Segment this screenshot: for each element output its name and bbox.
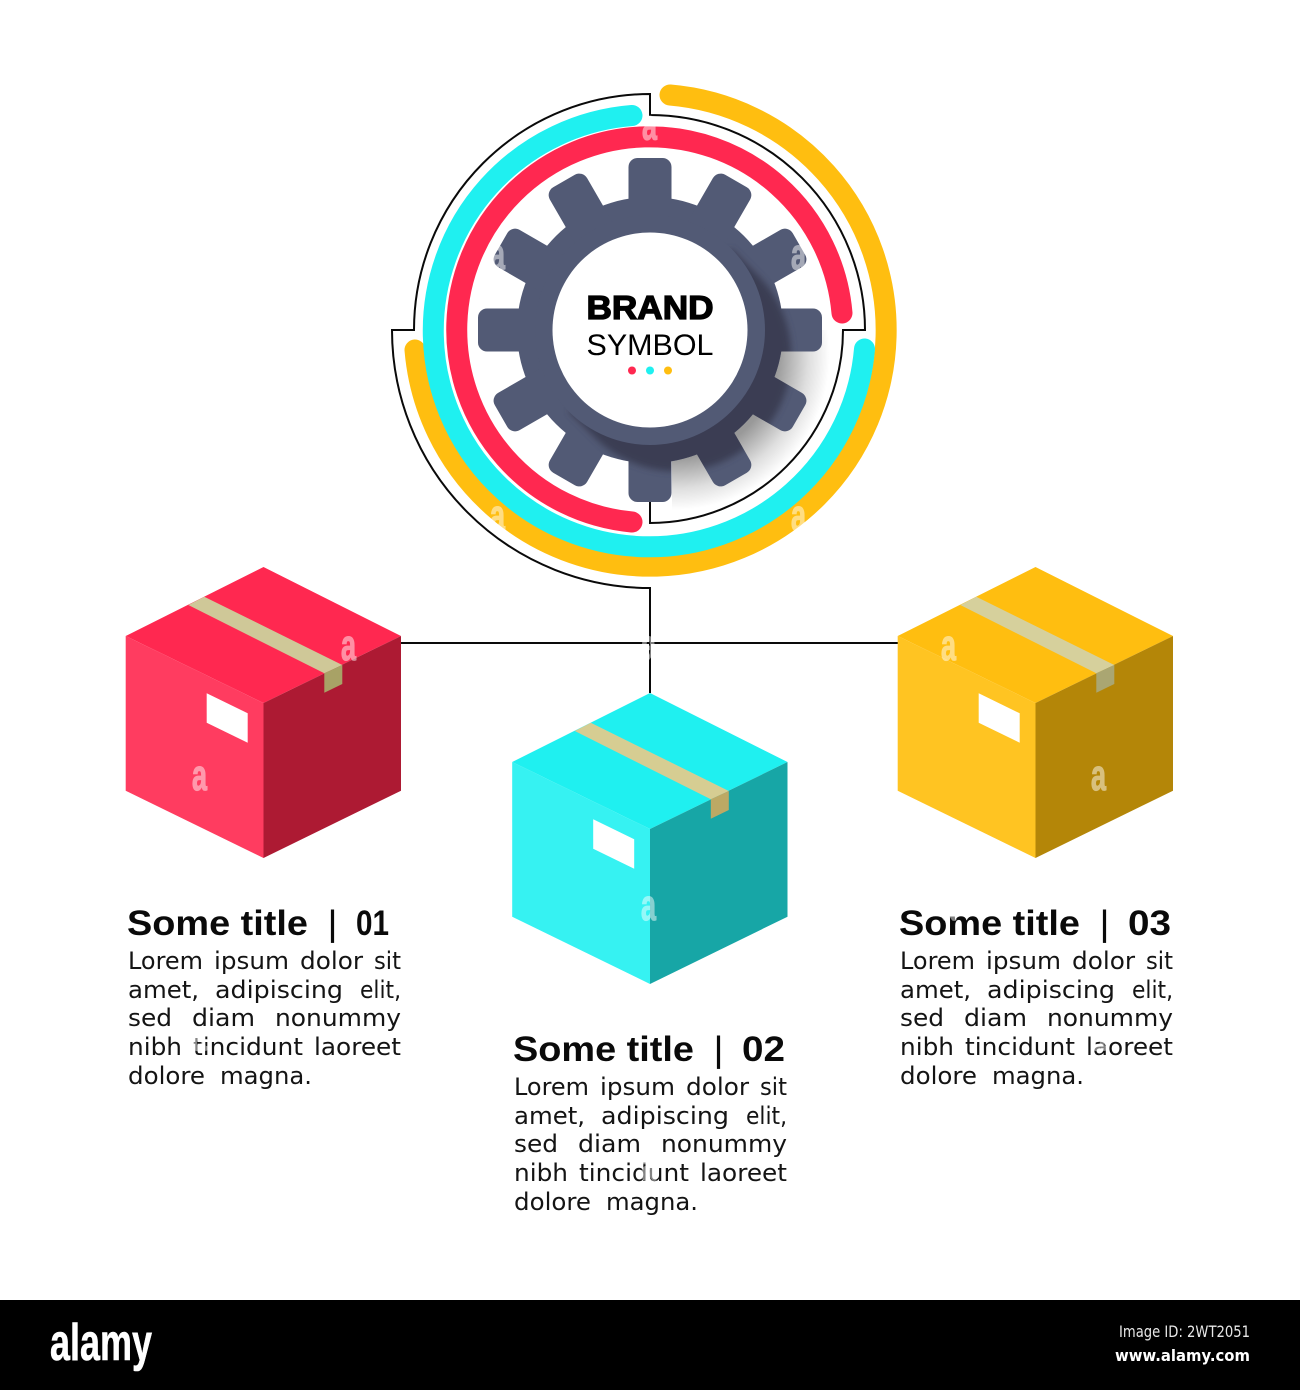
watermark marks: a (791, 230, 806, 279)
text block 01: Some title (127, 904, 308, 943)
text block 01: magna. (220, 1062, 312, 1090)
site url: www.alamy.com (1115, 1346, 1250, 1365)
text block 02: amet, (514, 1102, 585, 1130)
watermark marks: a (641, 1141, 656, 1190)
box 1: red (126, 567, 401, 858)
text block 01: adipiscing (215, 976, 343, 1004)
watermark marks: a (341, 621, 356, 670)
watermark marks: a (941, 881, 956, 930)
text block 03: tincidunt (965, 1033, 1075, 1061)
connector lines (392, 94, 898, 693)
watermark marks: a (642, 100, 657, 150)
box 2: cyan (512, 693, 788, 984)
text block 03: ipsum (986, 947, 1061, 975)
text block 02: diam (578, 1130, 641, 1158)
text block 02 (513, 1030, 787, 1216)
text block 02: elit, (746, 1102, 787, 1130)
text block 02: ipsum (600, 1073, 675, 1101)
text block 03: sit (1146, 947, 1173, 975)
text block 01: Lorem (128, 947, 203, 975)
text block 02: nonummy (661, 1130, 787, 1158)
gear drop shadow (672, 330, 824, 504)
text block 01: 01 (356, 904, 389, 943)
watermark marks: a (490, 491, 505, 540)
text block 02: nibh (514, 1159, 568, 1187)
text block 01: | (329, 904, 336, 943)
text block 03: 03 (1128, 904, 1171, 943)
watermark marks: a (1091, 1011, 1106, 1060)
text block 03: Some title (899, 904, 1080, 943)
red ring arc (457, 137, 842, 522)
brand symbol text (586, 289, 714, 362)
text block 02: sed (514, 1130, 558, 1158)
text block 01: nibh (128, 1033, 182, 1061)
watermark marks: a (941, 621, 956, 670)
text block 03: dolore (900, 1062, 977, 1090)
text block 03: elit, (1132, 976, 1173, 1004)
watermark marks: a (791, 491, 806, 540)
text block 03: magna. (992, 1062, 1084, 1090)
text block 01: dolore (128, 1062, 205, 1090)
text block 01: elit, (360, 976, 401, 1004)
text block 01: sit (374, 947, 401, 975)
text block 01: tincidunt (193, 1033, 303, 1061)
watermark marks: a (490, 230, 505, 279)
footer logo: alamy (50, 1314, 152, 1372)
text block 03: adipiscing (987, 976, 1115, 1004)
watermark marks: a (641, 621, 656, 670)
text block 03: amet, (900, 976, 971, 1004)
text block 01: diam (192, 1004, 255, 1032)
text block 03: diam (964, 1004, 1027, 1032)
brand symbol text: BRAND (586, 289, 714, 326)
text block 03: dolor (1072, 947, 1135, 975)
text block 01: nonummy (275, 1004, 401, 1032)
footer bar (0, 1300, 1300, 1390)
text block 02: dolore (514, 1188, 591, 1216)
text block 03: laoreet (1086, 1033, 1173, 1061)
icon: gear (478, 158, 822, 502)
box 3: yellow (898, 567, 1173, 858)
text block 02: dolor (686, 1073, 749, 1101)
text block 03: Lorem (900, 947, 975, 975)
text block 02: Lorem (514, 1073, 589, 1101)
text block 02: Some title (513, 1030, 694, 1069)
text block 01: dolor (300, 947, 363, 975)
watermark marks: a (1091, 751, 1106, 800)
text block 03: nibh (900, 1033, 954, 1061)
text block 02: laoreet (700, 1159, 787, 1187)
watermark marks (192, 100, 1106, 1190)
text block 03: | (1101, 904, 1108, 943)
text block 02: 02 (742, 1030, 785, 1069)
text block 02: adipiscing (601, 1102, 729, 1130)
watermark marks: a (192, 1011, 207, 1060)
text block 03: sed (900, 1004, 944, 1032)
watermark marks: a (192, 751, 207, 800)
cyan ring arc (433, 116, 864, 547)
text block 01: laoreet (314, 1033, 401, 1061)
image id: Image ID: 2WT2051 (1119, 1322, 1250, 1341)
brand dots (628, 366, 672, 374)
text block 02: | (715, 1030, 722, 1069)
text block 03: nonummy (1047, 1004, 1173, 1032)
text block 02: sit (760, 1073, 787, 1101)
text block 01: sed (128, 1004, 172, 1032)
yellow ring arc (415, 95, 886, 566)
text block 01: ipsum (214, 947, 289, 975)
text block 01: amet, (128, 976, 199, 1004)
text block 03 (899, 904, 1173, 1090)
text block 01 (127, 904, 401, 1090)
text block 02: magna. (606, 1188, 698, 1216)
text block 02: tincidunt (579, 1159, 689, 1187)
watermark marks: a (641, 881, 656, 930)
brand symbol text: SYMBOL (586, 329, 714, 362)
